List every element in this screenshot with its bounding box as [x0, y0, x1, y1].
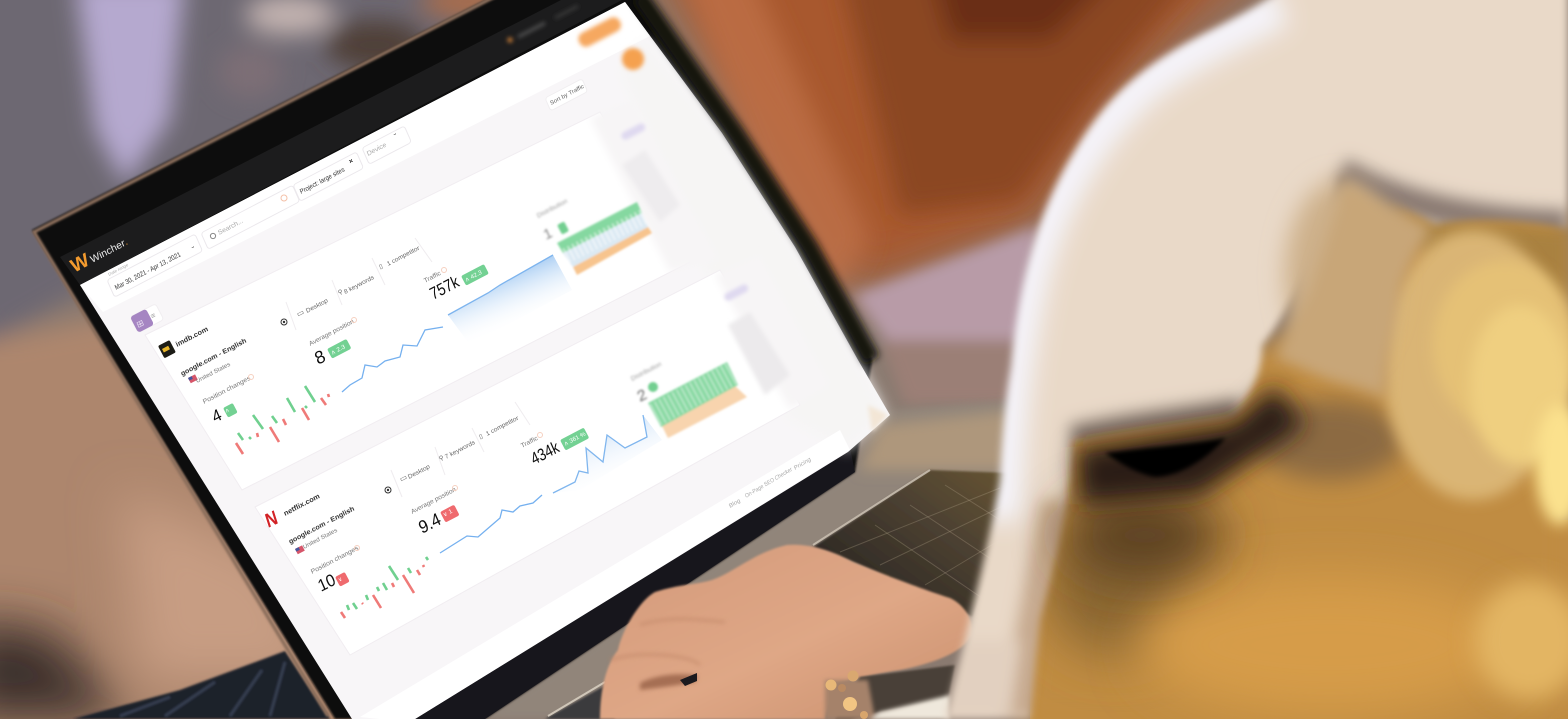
site name and logo	[158, 319, 287, 385]
site name and logo	[262, 487, 391, 554]
tags row: 1 competitor	[386, 244, 422, 268]
stat: traffic: 757k	[427, 271, 462, 304]
heatmap: distribution	[630, 361, 747, 438]
filter: date range: Mar 30, 2021 - Apr 13, 2021	[114, 251, 182, 292]
filter: device	[362, 126, 411, 164]
tags row: Desktop	[305, 297, 329, 315]
ring shadow	[640, 674, 698, 690]
stat: traffic	[520, 428, 589, 469]
shadow under the sleeve	[1072, 412, 1240, 440]
bar chart: position changes	[236, 386, 329, 454]
bokeh lights	[1383, 222, 1568, 700]
stat: position changes: ∧	[224, 407, 231, 415]
stat: average position: 8	[311, 345, 328, 369]
view toggle: ⊞	[135, 317, 145, 330]
upper left wall	[0, 0, 560, 370]
hand on keyboard	[600, 545, 973, 719]
stat: position changes	[310, 545, 360, 596]
panel: imdb.com card	[145, 100, 720, 490]
view toggle	[130, 304, 164, 333]
lower shadow of the arm	[1340, 172, 1568, 225]
heatmap: distribution	[536, 198, 652, 275]
tags row: ⚲	[337, 288, 344, 297]
stat: average position: Average position	[410, 486, 457, 516]
site name and logo: United States	[195, 361, 232, 385]
tags row: 8 keywords	[343, 274, 375, 296]
bar chart: position changes	[341, 557, 428, 618]
stat: average position	[410, 486, 460, 538]
faded table column	[622, 150, 680, 222]
stat: position changes: 10	[315, 569, 338, 596]
filter: project: Project: large sites	[299, 166, 346, 196]
line chart: average position	[440, 495, 542, 553]
footer links: On-Page SEO Checker	[744, 467, 793, 500]
area chart: traffic	[553, 415, 662, 493]
footer links	[728, 457, 812, 510]
header upgrade button	[508, 6, 644, 70]
filter: date range	[107, 234, 203, 297]
soft blurred far side of the screen	[620, 40, 885, 450]
out-of-focus right edge of the lid	[640, 0, 872, 360]
tags row: ▯	[378, 263, 384, 271]
filter: search: Search...	[217, 218, 244, 237]
sort button	[545, 79, 588, 111]
bottom white footer	[360, 430, 850, 719]
tags row	[391, 402, 530, 497]
tags row: 1 competitor	[485, 414, 521, 438]
logo: Wincher: Wincher.	[89, 237, 130, 266]
stat: traffic: ∧ 361 %	[563, 431, 587, 448]
lower strip tint	[1002, 492, 1068, 719]
tags row: ▯	[478, 433, 484, 441]
tan lobe by the elbow	[1275, 180, 1432, 398]
site name and logo: google.com - English	[180, 338, 248, 378]
tags row: Desktop	[407, 463, 431, 481]
faded table column	[728, 312, 790, 395]
filter: date range: Date range	[107, 262, 129, 277]
stat: average position: Average position	[308, 318, 355, 348]
deck of laptop and keyboard	[480, 400, 1030, 719]
lit corner of the screen	[868, 405, 888, 432]
filter: project	[293, 152, 364, 201]
stat: average position: 9.4	[415, 508, 444, 538]
lavender pill	[723, 283, 750, 302]
tags row: ⚲	[438, 454, 445, 463]
logo: Wincher	[68, 237, 130, 277]
heatmap: distribution: 2	[635, 386, 649, 406]
tags row: ▭	[398, 472, 408, 484]
dark shadow beneath the sleeve	[1065, 385, 1305, 575]
stat: position changes: Position changes	[202, 375, 252, 406]
logo: Wincher: W	[68, 250, 93, 277]
site name and logo: imdb.com	[174, 324, 210, 349]
bright left edge	[1000, 5, 1280, 520]
laptop screen: Wincher dashboard	[68, 2, 890, 719]
gold blurred foreground	[1020, 210, 1568, 719]
footer links: Pricing	[793, 457, 812, 472]
tags row: 7 keywords	[444, 439, 476, 461]
stat: position changes	[202, 374, 254, 427]
site name and logo: netflix.com	[282, 491, 321, 518]
white sweater sleeve	[930, 0, 1568, 719]
heatmap: distribution: 1	[541, 225, 555, 244]
line chart: average position	[342, 327, 443, 392]
stat: average position: ∧ 2.3	[330, 343, 347, 357]
stat: traffic: Traffic	[520, 435, 540, 450]
stat: average position: ∨ 1	[442, 508, 454, 519]
stat: traffic: ∧ 42.3	[464, 270, 483, 284]
filter: device: ⌄	[391, 130, 398, 138]
laptop lid and bezel	[32, 0, 872, 719]
watch strap and bracelet	[825, 665, 955, 719]
panel: netflix.com card	[255, 255, 830, 655]
stat: traffic	[423, 264, 489, 304]
footer links: Blog	[728, 498, 741, 510]
heatmap: distribution: Distribution	[630, 361, 663, 383]
lid edge	[34, 0, 500, 716]
sleeve of denim shirt	[73, 651, 330, 719]
stat: position changes: ∨	[337, 576, 344, 584]
stat: position changes: Position changes	[310, 545, 360, 576]
filter: date range: ⌄	[189, 243, 196, 251]
tags row: ▭	[295, 307, 305, 319]
keyboard	[545, 470, 1010, 719]
stat: average position	[308, 318, 356, 369]
stat: traffic: 434k	[528, 437, 562, 469]
site name and logo: United States	[302, 527, 339, 551]
filter: project: ×	[348, 158, 354, 166]
screen background	[80, 2, 890, 719]
tags row	[286, 238, 432, 330]
view toggle: ≡	[149, 310, 157, 321]
dark header bar	[60, 0, 660, 285]
filter: search	[201, 185, 300, 249]
lower bezel	[415, 448, 855, 719]
stat: position changes: 4	[209, 404, 225, 427]
top white toolbar	[80, 2, 650, 312]
heatmap: distribution: Distribution	[536, 198, 569, 220]
stat: traffic: Traffic	[423, 270, 443, 285]
sort button: Sort by Traffic	[549, 84, 585, 107]
site name and logo: N	[262, 505, 280, 532]
lavender pill	[620, 122, 647, 141]
filter: device: Device	[366, 142, 388, 158]
area chart: traffic	[448, 255, 572, 345]
site name and logo: google.com - English	[288, 506, 356, 546]
